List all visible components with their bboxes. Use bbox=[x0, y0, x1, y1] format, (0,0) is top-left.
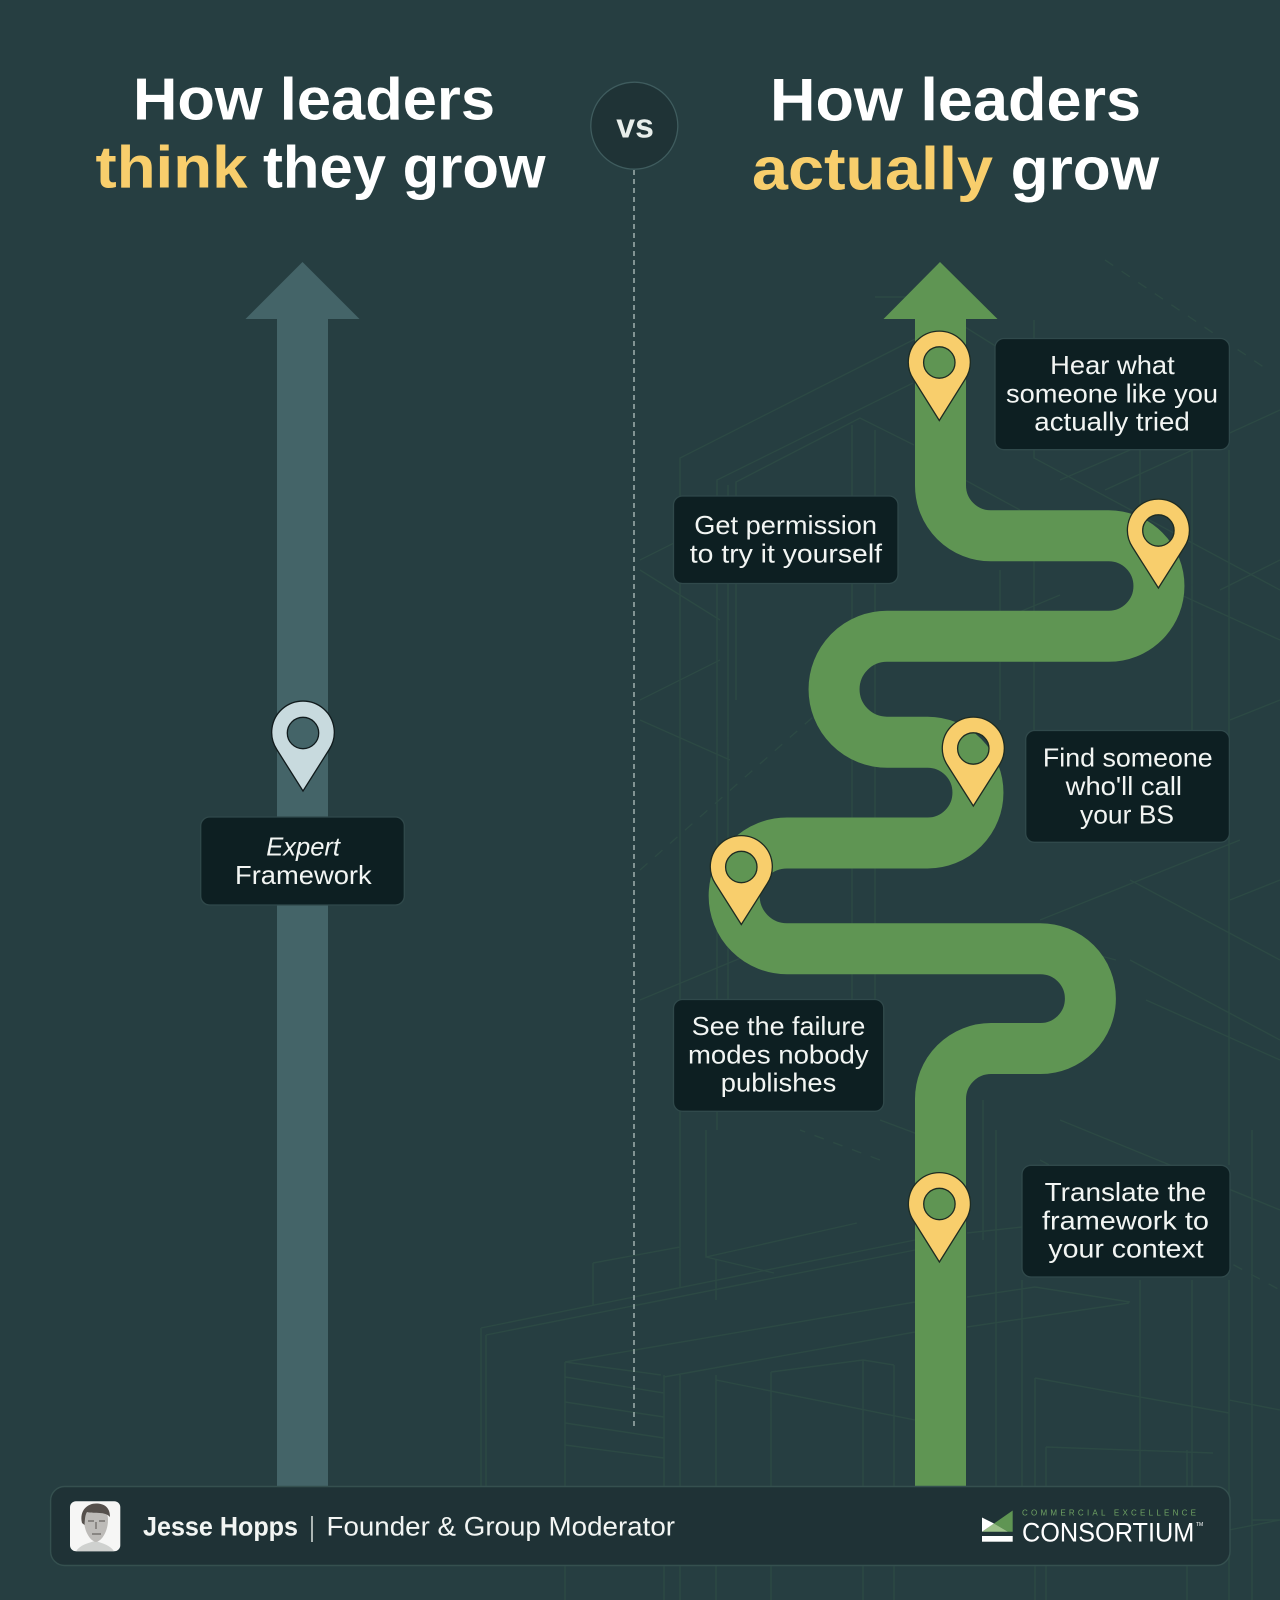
title: how leaders think they grow bbox=[96, 66, 546, 200]
pin: find someone bbox=[942, 717, 1004, 806]
divider: dashed line bbox=[633, 170, 635, 1426]
callout: expert framework bbox=[201, 817, 404, 905]
pin: expert framework bbox=[272, 701, 334, 791]
pin: translate the framework bbox=[908, 1173, 970, 1262]
title: how leaders think they grow: How leaders bbox=[133, 66, 495, 132]
role: Founder & Group Moderator bbox=[326, 1512, 675, 1542]
callout: see the failure modes nobody publishes: publishes bbox=[721, 1068, 836, 1098]
callout: find someone who'll call your BS: Find someone bbox=[1043, 743, 1213, 773]
arrow: winding real path bbox=[734, 262, 1159, 1487]
title: how leaders think they grow: think bbox=[96, 134, 248, 200]
callout: find someone who'll call your BS: your BS bbox=[1080, 799, 1174, 829]
callout: translate the framework to your context: your context bbox=[1048, 1234, 1205, 1264]
callout: see the failure modes nobody publishes: See the failure bbox=[692, 1011, 865, 1041]
logo: commercial excellence consortium: TM bbox=[1196, 1522, 1203, 1528]
callout: translate the framework to your context: framework to bbox=[1042, 1205, 1209, 1235]
pin: hear what someone tried bbox=[908, 331, 970, 420]
callout: see the failure modes nobody publishes bbox=[674, 1000, 884, 1111]
title: how leaders think they grow: they grow bbox=[263, 134, 546, 200]
arrow: straight expert path bbox=[246, 262, 360, 1487]
vs badge bbox=[591, 82, 678, 169]
callout: hear what someone like you actually tried: someone like you bbox=[1006, 378, 1218, 408]
callout: translate the framework to your context bbox=[1022, 1165, 1230, 1277]
vs badge: vs bbox=[616, 108, 654, 146]
callout: get permission to try it yourself bbox=[674, 496, 898, 584]
callout: see the failure modes nobody publishes: modes nobody bbox=[688, 1039, 869, 1069]
title: how leaders actually grow: grow bbox=[1011, 135, 1159, 202]
pin: see the failure modes bbox=[710, 836, 772, 924]
callout: expert framework: Expert bbox=[266, 832, 342, 862]
logo: commercial excellence consortium: CONSORTIUM bbox=[1022, 1518, 1194, 1548]
callout: find someone who'll call your BS: who'll call bbox=[1065, 771, 1182, 801]
callout: hear what someone like you actually tried: actually tried bbox=[1034, 406, 1190, 436]
portrait photo bbox=[70, 1501, 120, 1551]
callout: hear what someone like you actually tried: Hear what bbox=[1050, 350, 1176, 380]
logo: commercial excellence consortium bbox=[982, 1509, 1203, 1548]
callout: translate the framework to your context: Translate the bbox=[1045, 1177, 1206, 1207]
title: how leaders actually grow bbox=[752, 67, 1159, 202]
callout: expert framework: Framework bbox=[235, 860, 373, 890]
callout: get permission to try it yourself: Get permission bbox=[694, 510, 877, 540]
callout: find someone who'll call your BS bbox=[1026, 730, 1229, 842]
callout: get permission to try it yourself: to try it yourself bbox=[690, 538, 883, 568]
name: Jesse Hopps bbox=[143, 1512, 298, 1542]
logo: commercial excellence consortium: COMMERCIAL EXCELLENCE bbox=[1022, 1509, 1196, 1518]
title: how leaders actually grow: actually bbox=[752, 135, 994, 202]
footer bar bbox=[51, 1486, 1230, 1566]
callout: hear what someone like you actually tried bbox=[995, 338, 1229, 450]
pin: get permission bbox=[1127, 499, 1189, 588]
title: how leaders actually grow: How leaders bbox=[770, 67, 1141, 134]
